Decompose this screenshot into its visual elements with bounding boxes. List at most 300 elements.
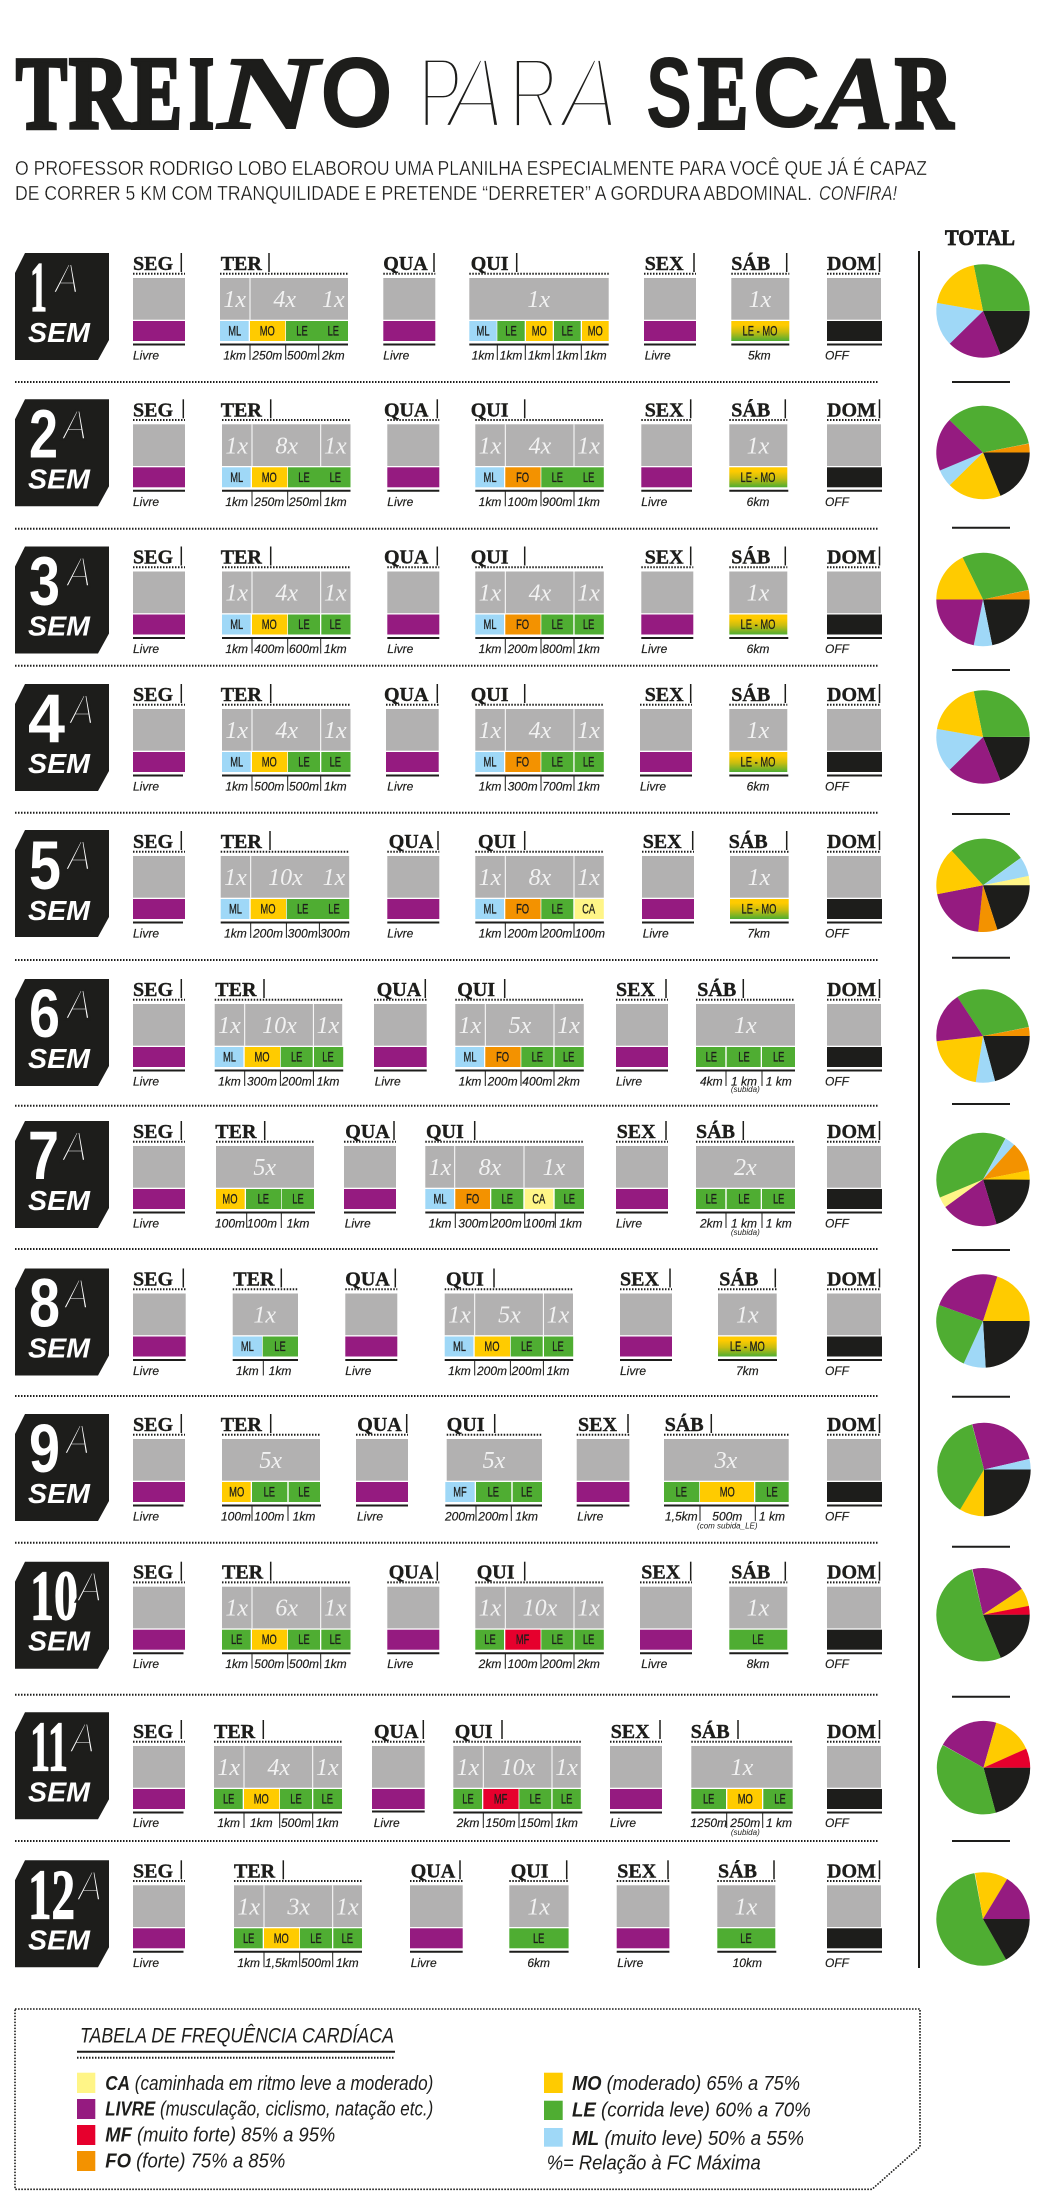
week 7 bbox=[15, 1117, 882, 1237]
SEX: SEX bbox=[645, 399, 684, 421]
week badge: A bbox=[76, 1564, 102, 1611]
QUI: 2km bbox=[556, 1074, 580, 1088]
SEG: Livre bbox=[133, 1216, 159, 1230]
week 4 bbox=[15, 680, 882, 794]
SAB: 1 km bbox=[766, 1074, 792, 1088]
separators week 10 bbox=[15, 1695, 1010, 1697]
separators week 9 bbox=[15, 1543, 1010, 1547]
TER: TER bbox=[215, 979, 257, 1001]
QUI: ML bbox=[434, 1191, 447, 1207]
SEX bbox=[644, 253, 696, 362]
QUI: 10x bbox=[501, 1755, 536, 1781]
QUI: MF bbox=[494, 1791, 507, 1807]
pie chart: week 3 bbox=[952, 568, 1014, 631]
DOM: DOM bbox=[827, 684, 876, 706]
QUI: 300m bbox=[458, 1216, 488, 1230]
week 2 bbox=[15, 395, 882, 509]
TER: 1km bbox=[218, 1074, 241, 1088]
SEG: SEG bbox=[133, 979, 173, 1001]
QUI: 1km bbox=[556, 348, 579, 362]
week badge: SEM bbox=[28, 1924, 91, 1955]
SEG: Livre bbox=[133, 926, 159, 940]
SAB: 1x bbox=[747, 580, 770, 606]
week badge: 5 bbox=[29, 827, 61, 904]
TER: 500m bbox=[281, 1816, 311, 1830]
week badge: SEM bbox=[28, 1332, 91, 1364]
TER: 300m bbox=[247, 1074, 277, 1088]
title: I bbox=[189, 36, 214, 151]
QUI: QUI bbox=[426, 1121, 464, 1143]
QUI: 200m bbox=[477, 1510, 508, 1524]
SAB: LE bbox=[774, 1791, 786, 1807]
TER: LE bbox=[290, 1791, 302, 1807]
SAB: SÁB bbox=[729, 830, 768, 853]
week badge: 1 bbox=[30, 249, 47, 327]
QUI bbox=[509, 1860, 569, 1970]
SAB: SÁB bbox=[719, 1268, 758, 1290]
QUI: 100m bbox=[508, 495, 538, 509]
TER: LE bbox=[328, 323, 339, 339]
DOM: DOM bbox=[827, 831, 876, 853]
QUA: QUA bbox=[389, 1562, 434, 1584]
QUI: 1x bbox=[543, 1155, 566, 1181]
TER: LE bbox=[330, 616, 341, 633]
QUI: FO bbox=[516, 616, 529, 633]
SEG: SEG bbox=[133, 1721, 173, 1743]
SAB: SÁB bbox=[696, 1120, 735, 1143]
QUI: LE bbox=[484, 1631, 496, 1648]
SEG: Livre bbox=[133, 348, 159, 362]
QUI bbox=[471, 399, 604, 509]
SEX: SEX bbox=[617, 1860, 657, 1882]
SAB: LE - MO bbox=[741, 469, 775, 485]
SAB: 1 km bbox=[766, 1816, 792, 1830]
SAB: 1x bbox=[734, 1013, 757, 1039]
DOM: DOM bbox=[827, 1562, 876, 1584]
SEX bbox=[610, 1720, 662, 1830]
QUA: Livre bbox=[387, 926, 414, 940]
TER: LE bbox=[342, 1930, 353, 1946]
SAB bbox=[729, 683, 788, 794]
legend heading: TABELA DE FREQUÊNCIA CARDÍACA bbox=[80, 2024, 394, 2047]
SEX: Livre bbox=[640, 780, 666, 794]
week badge bbox=[15, 542, 109, 654]
SEX: Livre bbox=[645, 348, 671, 362]
QUI: ML bbox=[484, 469, 497, 485]
week badge: SEM bbox=[28, 1776, 91, 1807]
TER: 1km bbox=[225, 1657, 248, 1671]
TER: LE bbox=[298, 616, 310, 633]
QUI: LE bbox=[552, 616, 563, 633]
SEX: SEX bbox=[611, 1721, 650, 1743]
QUI: 200m bbox=[507, 642, 538, 656]
pie chart: week 1 bbox=[950, 278, 1016, 344]
QUA: QUA bbox=[389, 831, 434, 853]
TER: TER bbox=[234, 1860, 276, 1882]
week badge: SEM bbox=[28, 895, 91, 926]
TER: 8x bbox=[275, 433, 298, 459]
separators week 6 bbox=[15, 1104, 1010, 1106]
QUI: FO bbox=[516, 754, 529, 770]
TER: 1km bbox=[316, 1816, 339, 1830]
QUI: 1x bbox=[577, 433, 600, 459]
pie chart: week 12 bbox=[951, 1887, 1015, 1951]
title: A bbox=[815, 36, 893, 151]
week badge: SEM bbox=[28, 1185, 91, 1216]
TER: 100m bbox=[221, 1510, 251, 1524]
TER: TER bbox=[221, 399, 262, 421]
SAB: 10km bbox=[733, 1956, 762, 1970]
TER: 4x bbox=[273, 287, 296, 313]
QUI: ML bbox=[464, 1049, 477, 1065]
week badge bbox=[15, 395, 109, 506]
week badge: A bbox=[61, 402, 87, 449]
QUI: QUI bbox=[446, 1268, 484, 1290]
QUI: 1x bbox=[577, 580, 600, 606]
SAB bbox=[718, 1268, 777, 1378]
title: C bbox=[752, 37, 821, 149]
QUA bbox=[384, 546, 439, 656]
title: T bbox=[16, 36, 67, 151]
QUI bbox=[453, 1720, 582, 1830]
TER: LE bbox=[258, 1191, 269, 1207]
TER: 4x bbox=[275, 580, 298, 606]
week badge bbox=[15, 1264, 109, 1376]
SEG bbox=[133, 1562, 185, 1671]
QUI: QUI bbox=[471, 399, 509, 421]
title: N bbox=[217, 36, 323, 151]
QUI: 1x bbox=[547, 1302, 570, 1328]
SAB: 500m bbox=[712, 1510, 742, 1524]
TER: 1km bbox=[324, 495, 347, 509]
legend item: LIVRE: LIVRE (musculação, ciclismo, natação etc.) bbox=[105, 2099, 433, 2121]
QUI: 5x bbox=[498, 1302, 521, 1328]
separators week 5 bbox=[15, 958, 1010, 960]
SAB bbox=[664, 1413, 789, 1530]
TER: 250m bbox=[251, 348, 282, 362]
QUA: Livre bbox=[345, 1216, 371, 1230]
TER: LE bbox=[297, 901, 308, 917]
TER: 250m bbox=[288, 495, 319, 509]
DOM: OFF bbox=[825, 348, 850, 362]
TER: LE bbox=[291, 1049, 302, 1065]
QUA: QUA bbox=[384, 684, 429, 706]
SAB: 1 km bbox=[766, 1216, 792, 1230]
DOM: DOM bbox=[827, 1268, 876, 1290]
TER: 1km bbox=[293, 1510, 315, 1524]
SAB: 1 km bbox=[731, 1216, 757, 1230]
SEX: Livre bbox=[616, 1216, 642, 1230]
TER: 1km bbox=[217, 1816, 240, 1830]
SEG: Livre bbox=[133, 1510, 159, 1524]
SAB: 1,5km bbox=[665, 1510, 698, 1524]
SAB: LE - MO bbox=[742, 901, 776, 917]
SEG: Livre bbox=[133, 1816, 159, 1830]
TER: LE bbox=[298, 469, 310, 485]
QUI: 1x bbox=[557, 1013, 580, 1039]
DOM bbox=[825, 1720, 882, 1830]
week badge: SEM bbox=[28, 610, 91, 642]
QUA: Livre bbox=[387, 495, 414, 509]
TER: 1x bbox=[253, 1302, 276, 1328]
SAB bbox=[729, 830, 789, 940]
DOM: OFF bbox=[825, 780, 850, 794]
QUA: QUA bbox=[383, 253, 428, 275]
TER: ML bbox=[230, 754, 244, 770]
week badge: A bbox=[64, 1416, 90, 1464]
TER: 1km bbox=[236, 1364, 259, 1378]
TER: ML bbox=[228, 323, 242, 339]
SAB: 6km bbox=[747, 642, 769, 656]
week badge: A bbox=[69, 1715, 95, 1762]
SEG bbox=[133, 684, 185, 794]
TER: 1km bbox=[324, 1657, 347, 1671]
QUI bbox=[469, 253, 609, 362]
week badge: A bbox=[65, 832, 91, 880]
SAB: SÁB bbox=[731, 1561, 770, 1584]
QUI: QUI bbox=[457, 979, 495, 1001]
QUA: QUA bbox=[345, 1268, 390, 1290]
SEX: Livre bbox=[610, 1816, 636, 1830]
QUI bbox=[445, 1268, 573, 1378]
TER: 2km bbox=[321, 348, 345, 362]
DOM bbox=[825, 831, 882, 940]
SAB: SÁB bbox=[697, 978, 736, 1001]
TER: 1x bbox=[217, 1755, 240, 1781]
TER: 500m bbox=[287, 348, 317, 362]
SAB: SÁB bbox=[731, 398, 770, 421]
SEG: SEG bbox=[133, 1121, 173, 1143]
QUI bbox=[471, 684, 604, 794]
QUI: 200m bbox=[511, 1364, 542, 1378]
DOM: DOM bbox=[827, 1121, 876, 1143]
SEX: SEX bbox=[643, 831, 682, 853]
SAB: SÁB bbox=[731, 683, 770, 706]
SAB: LE - MO bbox=[741, 754, 775, 770]
TER: 600m bbox=[289, 642, 319, 656]
QUI: 200m bbox=[507, 926, 538, 940]
TER: 500m bbox=[301, 1956, 331, 1970]
SAB: 4km bbox=[700, 1074, 723, 1088]
SAB: MO bbox=[738, 1791, 753, 1807]
SEX bbox=[577, 1414, 629, 1524]
QUA: Livre bbox=[411, 1956, 437, 1970]
week 3 bbox=[15, 542, 882, 656]
QUI: 4x bbox=[529, 580, 552, 606]
QUI: LE bbox=[462, 1791, 474, 1807]
QUI: LE bbox=[521, 1484, 532, 1500]
TER: 1x bbox=[324, 433, 347, 459]
QUI: MO bbox=[484, 1338, 500, 1355]
QUI: 1km bbox=[500, 348, 522, 362]
week 8 bbox=[15, 1264, 882, 1378]
QUI: LE bbox=[502, 1191, 513, 1207]
QUI: 200m bbox=[541, 1657, 572, 1671]
DOM: DOM bbox=[827, 979, 876, 1001]
SEX bbox=[640, 1562, 692, 1671]
DOM bbox=[825, 399, 882, 509]
TER: 1km bbox=[324, 780, 347, 794]
SAB: 2km bbox=[699, 1216, 723, 1230]
SEX: Livre bbox=[577, 1510, 604, 1524]
SEX: SEX bbox=[616, 979, 655, 1001]
QUA: Livre bbox=[357, 1510, 383, 1524]
QUI: CA bbox=[532, 1191, 545, 1207]
QUI: 1x bbox=[448, 1302, 471, 1328]
TER: 1km bbox=[269, 1364, 291, 1378]
SEG: SEG bbox=[133, 1562, 173, 1584]
QUI: 200m bbox=[541, 926, 572, 940]
TER: 1x bbox=[237, 1894, 260, 1920]
SEG: SEG bbox=[133, 1860, 173, 1882]
QUA: QUA bbox=[357, 1414, 402, 1436]
TER: 1x bbox=[218, 1013, 241, 1039]
week badge: 4 bbox=[28, 680, 65, 757]
TER: 1x bbox=[323, 865, 346, 891]
QUI: 100m bbox=[525, 1216, 555, 1230]
TER: 1x bbox=[324, 580, 347, 606]
QUA bbox=[410, 1860, 463, 1970]
week badge: SEM bbox=[28, 1478, 91, 1509]
QUI: 1x bbox=[527, 287, 550, 313]
TER: 1x bbox=[225, 580, 248, 606]
QUI: LE bbox=[533, 1930, 544, 1946]
SEG: SEG bbox=[133, 253, 173, 275]
SAB bbox=[717, 1859, 776, 1970]
QUI: LE bbox=[561, 1791, 572, 1807]
TER: 1x bbox=[322, 287, 345, 313]
week badge: SEM bbox=[28, 463, 91, 494]
QUI: QUI bbox=[511, 1860, 549, 1882]
SAB: MO bbox=[720, 1484, 735, 1500]
week badge: SEM bbox=[28, 1043, 91, 1074]
QUI: 1x bbox=[479, 1596, 502, 1622]
QUI: LE bbox=[552, 469, 563, 485]
QUI: 1km bbox=[555, 1816, 578, 1830]
SAB: 1x bbox=[735, 1894, 758, 1920]
DOM: OFF bbox=[825, 1956, 850, 1970]
DOM bbox=[825, 684, 882, 794]
QUI: 300m bbox=[508, 780, 538, 794]
week badge: A bbox=[68, 686, 94, 734]
QUA: Livre bbox=[387, 642, 414, 656]
TER: 1km bbox=[237, 1956, 260, 1970]
QUI: LE bbox=[562, 323, 573, 339]
week badge: A bbox=[63, 1271, 89, 1318]
SAB: LE bbox=[752, 1631, 764, 1648]
TER bbox=[215, 979, 343, 1088]
QUA: Livre bbox=[375, 1074, 401, 1088]
SEG: SEG bbox=[133, 684, 173, 706]
DOM: OFF bbox=[825, 926, 850, 940]
DOM bbox=[825, 546, 882, 656]
SAB: LE bbox=[766, 1484, 778, 1500]
QUI: 1km bbox=[528, 348, 551, 362]
SAB: (subida) bbox=[731, 1828, 760, 1837]
TER: 6x bbox=[275, 1596, 298, 1622]
DOM bbox=[825, 253, 882, 362]
QUI: 100m bbox=[575, 926, 605, 940]
QUI: 1km bbox=[479, 926, 501, 940]
SEG bbox=[133, 1121, 185, 1230]
SAB bbox=[729, 1561, 788, 1671]
TER: 5x bbox=[253, 1155, 276, 1181]
QUI: 1km bbox=[479, 780, 501, 794]
QUI bbox=[425, 1121, 584, 1230]
QUI: MO bbox=[588, 323, 603, 339]
QUI: MO bbox=[532, 323, 547, 339]
QUA bbox=[372, 1720, 425, 1830]
week badge: 9 bbox=[29, 1410, 60, 1487]
TER bbox=[215, 1121, 315, 1230]
DOM: OFF bbox=[825, 1364, 850, 1378]
week badge: 12 bbox=[28, 1856, 75, 1934]
QUI: 1km bbox=[577, 495, 600, 509]
QUA bbox=[387, 831, 439, 940]
TER: ML bbox=[230, 616, 244, 633]
legend item: MF: MF (muito forte) 85% a 95% bbox=[105, 2125, 335, 2147]
SEG: Livre bbox=[133, 1657, 159, 1671]
TER: 1x bbox=[324, 1596, 347, 1622]
QUA: Livre bbox=[387, 1657, 414, 1671]
QUI: 700m bbox=[542, 780, 572, 794]
SAB bbox=[731, 252, 789, 362]
QUI: 5x bbox=[483, 1448, 506, 1474]
week badge: 7 bbox=[28, 1117, 59, 1194]
QUI: ML bbox=[484, 616, 497, 633]
QUI: LE bbox=[488, 1484, 499, 1500]
QUI: 150m bbox=[486, 1816, 516, 1830]
week badge bbox=[15, 249, 109, 360]
TER: 500m bbox=[254, 1657, 284, 1671]
QUI: 400m bbox=[522, 1074, 552, 1088]
DOM: DOM bbox=[827, 1860, 876, 1882]
QUI: FO bbox=[516, 901, 529, 917]
TER: 1km bbox=[250, 1816, 273, 1830]
TER: TER bbox=[221, 684, 262, 706]
QUA: QUA bbox=[345, 1121, 390, 1143]
SEG: Livre bbox=[133, 1074, 159, 1088]
week 11 bbox=[15, 1708, 882, 1837]
QUI: QUI bbox=[455, 1721, 493, 1743]
QUI: 1x bbox=[577, 718, 600, 744]
week badge bbox=[15, 1856, 109, 1967]
QUI: LE bbox=[505, 323, 517, 339]
legend panel bbox=[15, 2009, 920, 2189]
QUI: FO bbox=[466, 1191, 479, 1207]
TER: MO bbox=[229, 1484, 244, 1500]
TER: MO bbox=[262, 754, 277, 770]
QUI: 150m bbox=[520, 1816, 550, 1830]
QUI: 200m bbox=[487, 1074, 518, 1088]
pie chart: week 7 bbox=[950, 1147, 1016, 1212]
TER: 1x bbox=[223, 287, 246, 313]
QUI bbox=[444, 1414, 542, 1524]
SAB: 7km bbox=[747, 926, 770, 940]
intro text bbox=[15, 157, 927, 205]
QUI: QUI bbox=[471, 253, 509, 275]
QUA bbox=[383, 253, 435, 362]
TER bbox=[222, 1562, 350, 1671]
DOM: OFF bbox=[825, 1657, 850, 1671]
TER: 1x bbox=[324, 718, 347, 744]
QUI: 1km bbox=[479, 495, 501, 509]
TER: LE bbox=[292, 1191, 304, 1207]
pie chart: week 9 bbox=[952, 1437, 1016, 1502]
QUA bbox=[356, 1414, 408, 1524]
DOM bbox=[825, 1860, 882, 1970]
SEG bbox=[133, 546, 185, 656]
